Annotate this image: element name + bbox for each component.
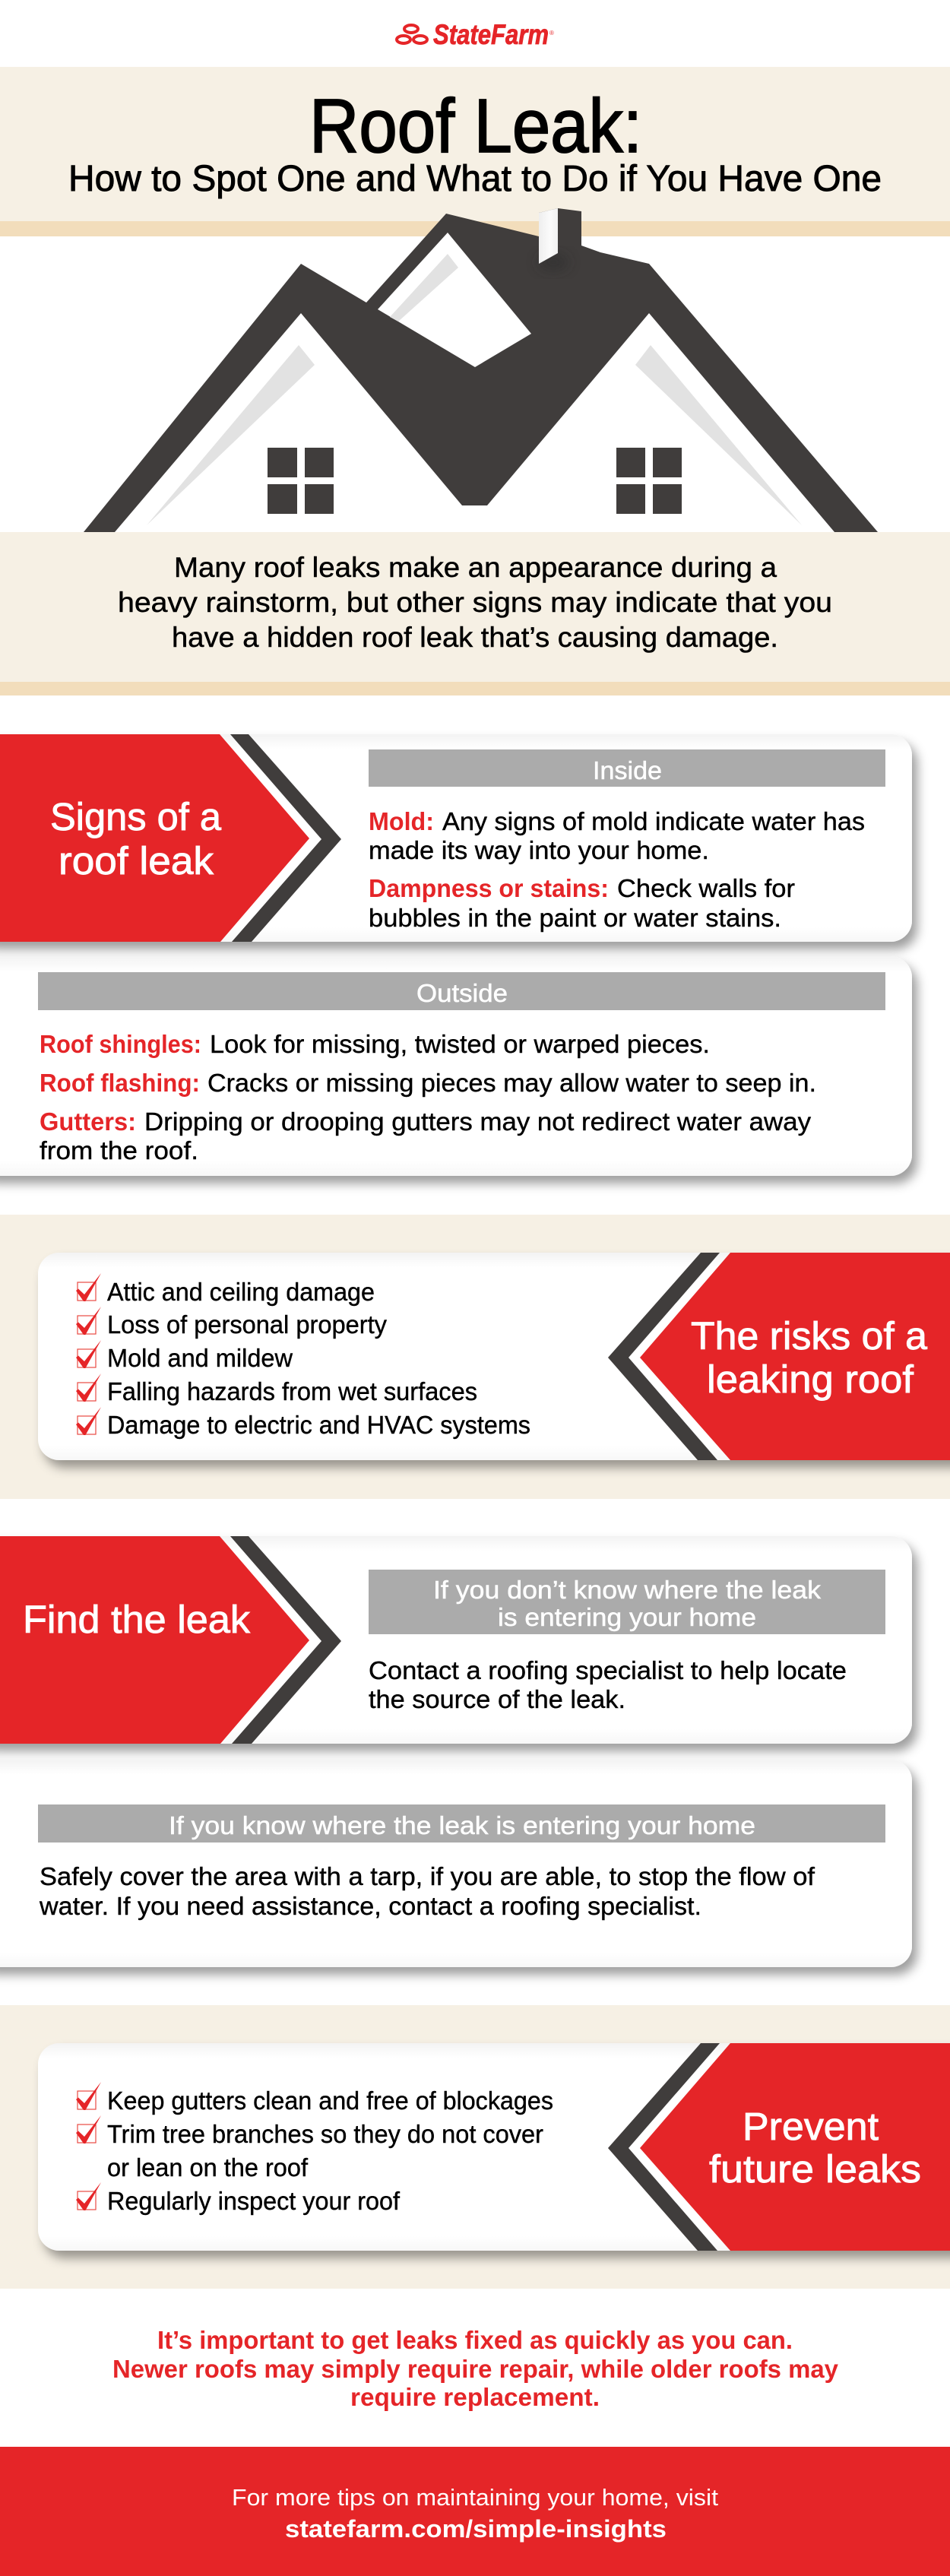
heading: the risks of a leaking roof	[691, 1314, 928, 1401]
text: closing statement: It’s important to get leaks fixed as quickly as you can.	[157, 2326, 793, 2354]
panel: title banner	[0, 67, 950, 236]
intro text: heavy rainstorm, but other signs may indicate that you	[118, 587, 832, 618]
checklist: risks: Attic and ceiling damage	[107, 1278, 375, 1306]
text: contact a roofing specialist: Contact a roofing specialist to help locate	[369, 1656, 847, 1684]
icon: right gable highlight	[635, 345, 802, 525]
header: if you don't know: If you don’t know where the leak	[433, 1576, 822, 1604]
logo: State Farm: StateFarm	[433, 19, 549, 50]
text: contact a roofing specialist: the source of the leak.	[369, 1685, 625, 1713]
header: if you know	[38, 1804, 885, 1842]
panel: find the leak, known location	[0, 1760, 912, 1967]
checklist: risks: Loss of personal property	[107, 1310, 387, 1339]
intro text	[118, 552, 832, 653]
panel: prevent future leaks	[0, 2005, 950, 2289]
text: closing statement: Newer roofs may simply require repair, while older roofs may	[112, 2355, 839, 2383]
heading: find the leak: Find the leak	[23, 1598, 251, 1641]
panel: footer	[0, 2447, 950, 2576]
header: if you don't know	[369, 1570, 885, 1634]
checklist: risks: Mold and mildew	[107, 1344, 293, 1372]
text: more tips: For more tips on maintaining your home, visit	[232, 2484, 718, 2511]
text: safely cover: water. If you need assistance, contact a roofing specialist.	[39, 1892, 701, 1920]
text: mold: Any signs of mold indicate water has	[442, 807, 865, 835]
text: closing statement	[112, 2326, 839, 2411]
checklist: prevention: Trim tree branches so they do not cover	[107, 2120, 543, 2148]
text: safely cover: Safely cover the area with a tarp, if you are able, to stop the flow of	[40, 1862, 815, 1890]
text: gutters: Dripping or drooping gutters may not redirect water away	[144, 1107, 812, 1136]
heading: signs of a roof leak	[50, 795, 222, 882]
text: dampness or stains: Dampness or stains:	[369, 874, 609, 902]
header: if you know: If you know where the leak is entering your home	[169, 1811, 755, 1839]
checklist: risks: Falling hazards from wet surfaces	[107, 1377, 477, 1405]
panel: find the leak, unknown location	[0, 1536, 912, 1744]
checklist: risks: Damage to electric and HVAC systems	[107, 1411, 530, 1439]
header: outside: Outside	[416, 979, 508, 1007]
panel: signs of a roof leak, outside	[0, 956, 912, 1176]
checklist: prevention: Keep gutters clean and free of blockages	[107, 2086, 553, 2115]
icon: left window	[268, 448, 334, 514]
panel: risks of a leaking roof	[0, 1215, 950, 1499]
panel: introduction	[0, 532, 950, 695]
text: gutters: Gutters:	[40, 1107, 136, 1136]
intro text: Many roof leaks make an appearance during a	[174, 552, 777, 583]
arrow: find chevron	[0, 1536, 341, 1744]
heading: prevent future leaks: Prevent	[743, 2105, 879, 2148]
text: contact a roofing specialist	[369, 1656, 847, 1713]
text: dampness or stains: bubbles in the paint or water stains.	[369, 904, 781, 932]
checklist: prevention	[76, 2082, 553, 2215]
text: website: statefarm.com/simple-insights	[285, 2515, 667, 2543]
arrow: prevent chevron	[608, 2043, 950, 2251]
panel: signs of a roof leak, inside	[0, 734, 912, 942]
heading: prevent future leaks: future leaks	[709, 2147, 921, 2191]
text: mold: made its way into your home.	[369, 836, 709, 864]
header: if you don't know: is entering your home	[498, 1603, 756, 1631]
text: roof flashing: Cracks or missing pieces may allow water to seep in.	[207, 1069, 816, 1097]
text: dampness or stains	[369, 874, 795, 932]
text: safely cover	[39, 1862, 815, 1920]
icon: right window	[616, 448, 682, 514]
text: gutters: from the roof.	[40, 1136, 198, 1164]
heading: signs of a roof leak: roof leak	[59, 839, 214, 882]
icon: left gable highlight	[147, 345, 315, 525]
text: roof shingles: Roof shingles:	[40, 1030, 201, 1058]
icon: chimney	[538, 208, 568, 271]
icon: dormer window	[378, 233, 531, 367]
title: Roof Leak:	[309, 84, 642, 169]
checklist: prevention: or lean on the roof	[107, 2153, 309, 2182]
header: inside	[369, 749, 885, 787]
illustration: house roof	[84, 208, 878, 532]
checklist: risks	[76, 1273, 530, 1439]
heading: signs of a roof leak: Signs of a	[50, 795, 222, 838]
text: mold: Mold:	[369, 807, 434, 835]
header: outside	[38, 972, 885, 1010]
heading: the risks of a leaking roof: leaking roof	[707, 1358, 914, 1401]
text: roof shingles: Look for missing, twisted or warped pieces.	[210, 1030, 710, 1058]
checklist: prevention: Regularly inspect your roof	[107, 2187, 401, 2215]
intro text: have a hidden roof leak that’s causing damage.	[172, 622, 778, 653]
arrow: risks chevron	[608, 1253, 950, 1460]
text: roof flashing: Roof flashing:	[40, 1069, 200, 1097]
text: mold	[369, 807, 865, 864]
subtitle: How to Spot One and What to Do if You Have One	[68, 159, 882, 199]
heading: the risks of a leaking roof: The risks of a	[691, 1314, 928, 1358]
header: inside: Inside	[593, 756, 662, 784]
logo: State Farm	[397, 19, 554, 50]
text: closing statement: require replacement.	[350, 2383, 600, 2411]
heading: prevent future leaks	[709, 2105, 921, 2191]
logo: State Farm: ®	[549, 30, 554, 36]
text: dampness or stains: Check walls for	[617, 874, 795, 902]
arrow: signs chevron	[0, 734, 341, 942]
text: gutters	[40, 1107, 812, 1164]
